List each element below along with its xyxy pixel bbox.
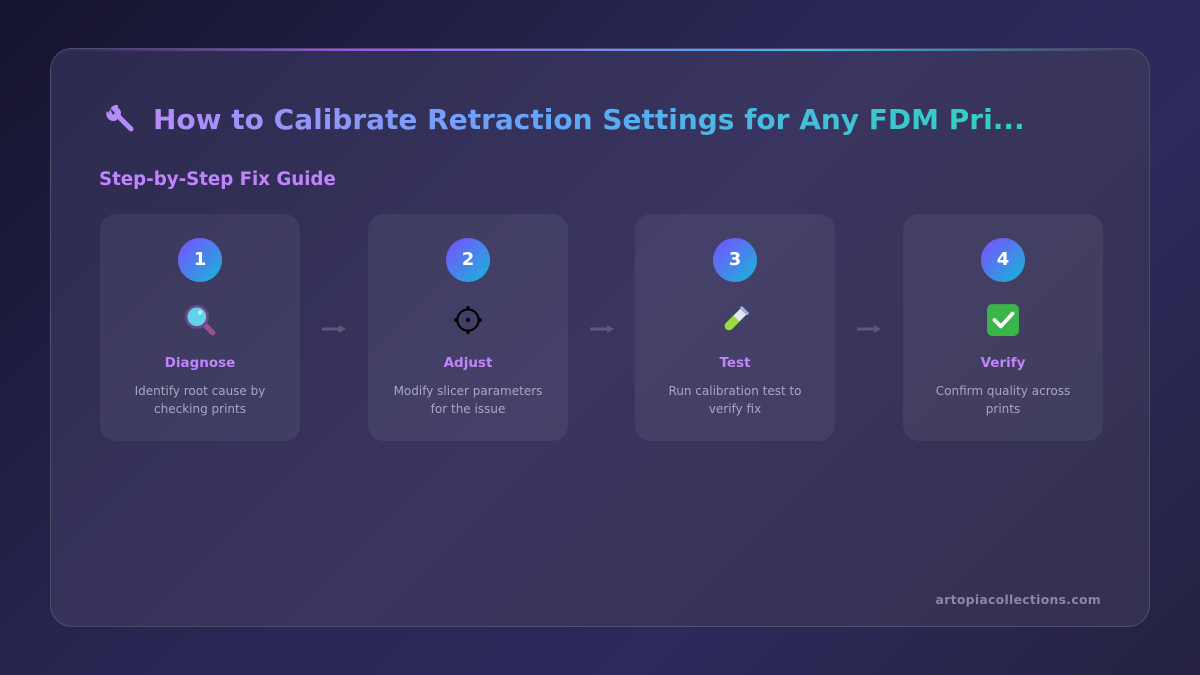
main panel	[50, 48, 1150, 627]
icon: check	[987, 304, 1019, 336]
badge 3: 3	[729, 249, 741, 270]
card: test	[635, 214, 835, 441]
card: diagnose	[100, 214, 300, 441]
badge 2: 2	[462, 249, 474, 270]
badge 4: 4	[997, 249, 1009, 270]
description: Identify root cause by checking prints	[135, 384, 265, 416]
card: verify	[903, 214, 1103, 441]
name: Test	[719, 355, 751, 371]
name: Verify	[981, 355, 1025, 371]
name: Diagnose	[165, 355, 235, 371]
subtitle: Step-by-Step Fix Guide	[99, 169, 336, 190]
description: Run calibration test to verify fix	[668, 384, 802, 416]
badge 1	[178, 238, 222, 282]
arrow 3	[857, 325, 881, 333]
icon: gear	[454, 306, 482, 334]
badge 3	[713, 238, 757, 282]
name: Adjust	[444, 355, 492, 371]
badge 1: 1	[194, 249, 206, 270]
description: Modify slicer parameters for the issue	[394, 384, 542, 416]
arrow 1	[322, 325, 346, 333]
icon: wrench	[106, 104, 134, 132]
arrow 2	[590, 325, 614, 333]
icon: magnifier	[184, 304, 216, 336]
footer credit: artopiacollections.com	[936, 592, 1101, 607]
description: Confirm quality across prints	[936, 384, 1070, 416]
badge 2	[446, 238, 490, 282]
card: adjust	[368, 214, 568, 441]
badge 4	[981, 238, 1025, 282]
icon: test tube	[724, 306, 749, 330]
title: How to Calibrate Retraction Settings for Any FDM Pri...	[153, 103, 1025, 136]
